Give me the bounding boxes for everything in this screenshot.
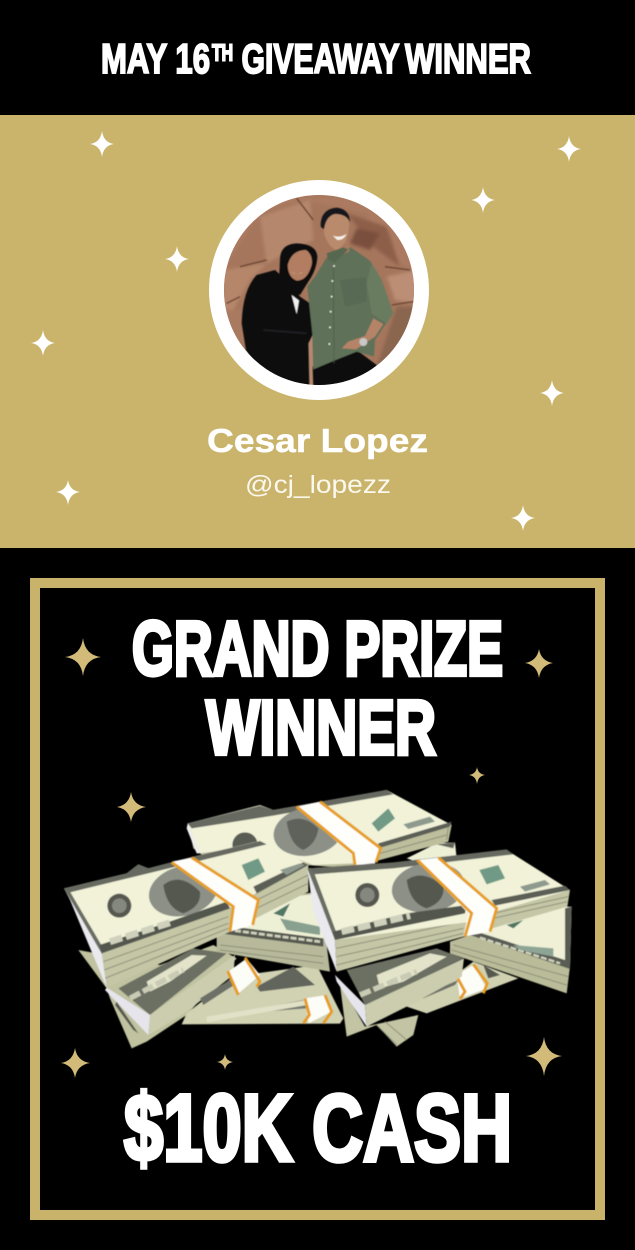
lower center bundles	[182, 958, 343, 1024]
man	[313, 350, 377, 387]
paper band	[417, 858, 497, 937]
photo: couple against red rock	[220, 190, 420, 390]
title	[101, 35, 531, 82]
paper band	[297, 802, 380, 865]
front left stack	[64, 840, 308, 988]
middle right stack	[335, 948, 464, 1047]
panel: grand prize frame	[35, 583, 600, 1215]
prize amount: $10K CASH	[124, 1076, 512, 1182]
winner handle: @cj_lopezz	[245, 471, 391, 499]
title: WINNER	[405, 35, 531, 82]
right lower bundle	[407, 962, 518, 1013]
title: MAY 16	[101, 35, 210, 82]
right lower stack	[450, 907, 572, 993]
bottom left stack	[78, 945, 237, 1048]
woman	[242, 270, 315, 387]
winner name: Cesar Lopez	[207, 422, 428, 459]
illustration: stacks of hundred dollar bills	[64, 790, 572, 1048]
icons: gold sparkles	[61, 638, 562, 1078]
panel: winner profile	[0, 115, 635, 548]
profile ring	[209, 180, 429, 400]
title: GIVEAWAY	[242, 35, 400, 82]
back stack	[187, 790, 457, 868]
icons: white sparkles	[31, 131, 581, 531]
heading: grand prize winner	[132, 606, 503, 771]
center bill behind	[217, 892, 330, 972]
heading: grand prize winner: WINNER	[206, 685, 436, 771]
front right stack	[307, 849, 570, 972]
paper band	[172, 858, 258, 932]
title: TH	[212, 40, 233, 66]
header background	[0, 0, 635, 115]
